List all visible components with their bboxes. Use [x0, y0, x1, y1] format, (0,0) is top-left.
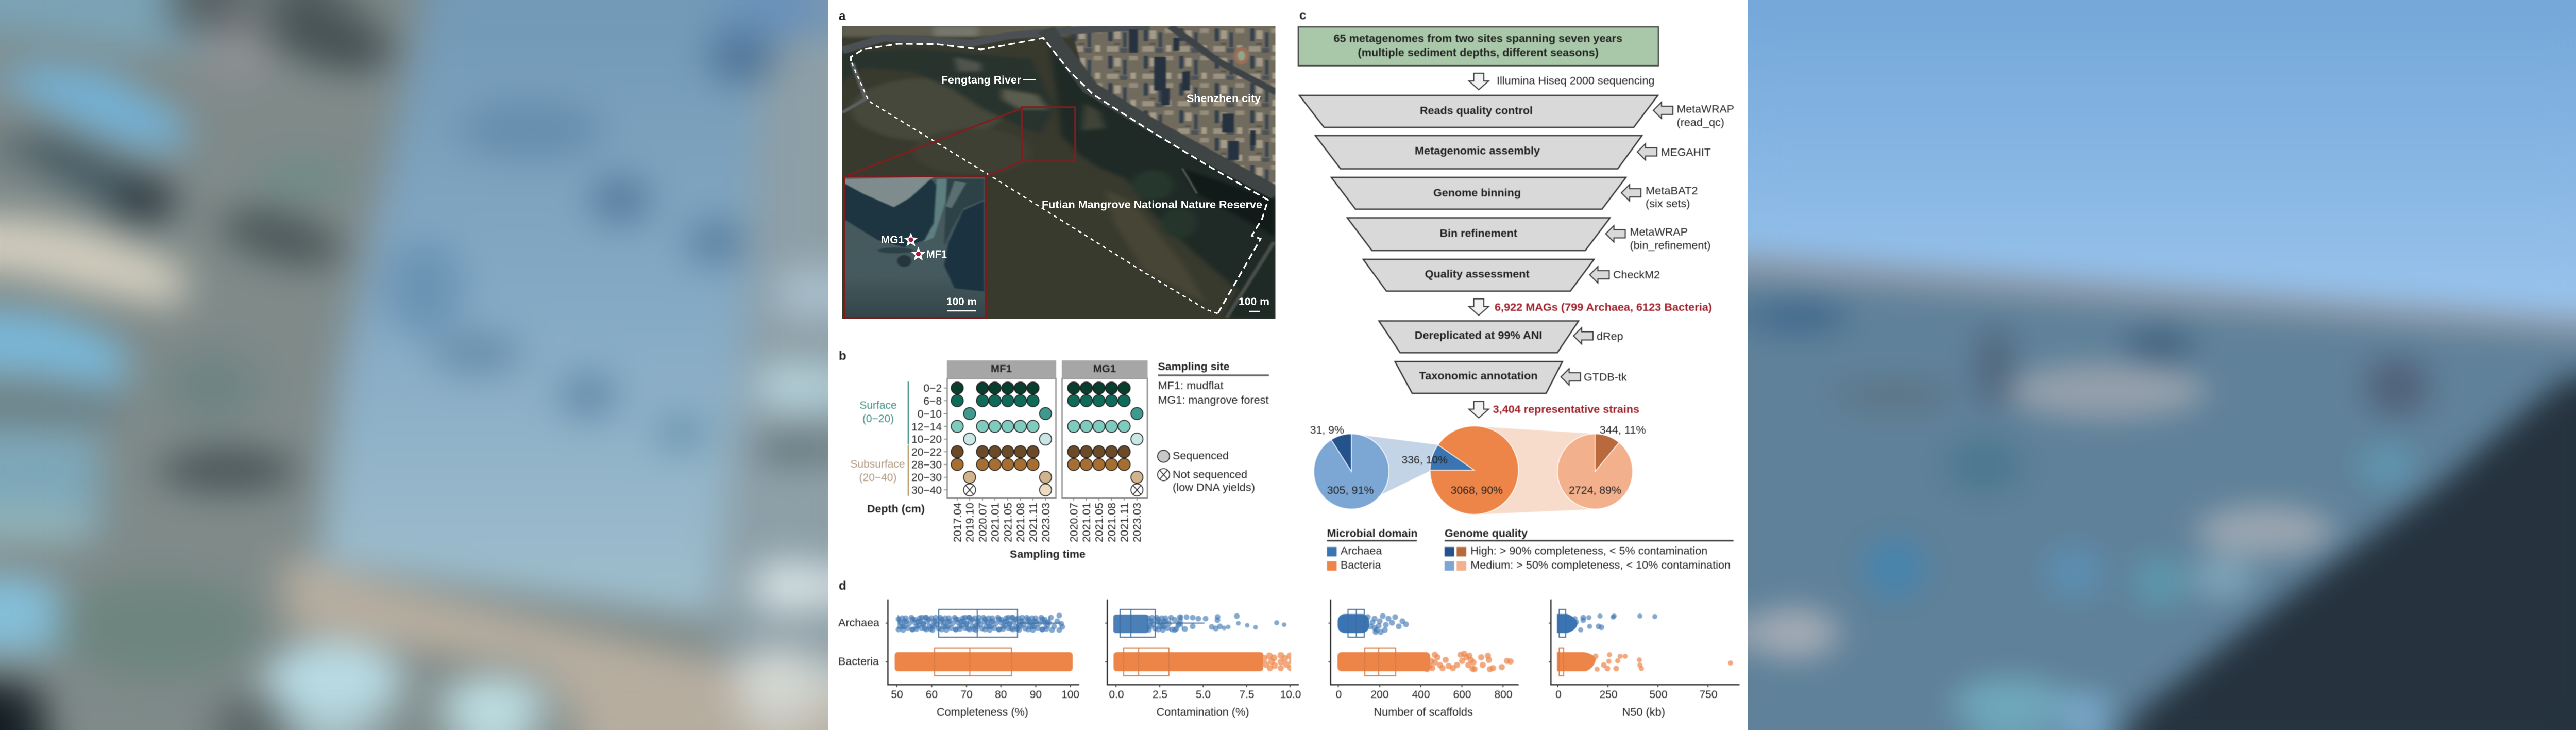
subsurface group label: (20−40): [859, 472, 896, 484]
sampling time labels: 2019.10: [964, 503, 976, 542]
strip plot: completeness: 90: [1030, 689, 1042, 701]
tool: MetaBAT2: [1621, 185, 1698, 210]
subsurface group label: [850, 445, 908, 496]
row label Bacteria: Bacteria: [838, 656, 879, 668]
strip plot: completeness: 70: [960, 689, 973, 701]
legend: genome quality: Medium: > 50% completeness, < 10% contamination: [1470, 559, 1731, 571]
depth axis labels: [911, 383, 942, 496]
legend: genome quality: High: > 90% completeness, < 5% contamination: [1470, 545, 1707, 557]
panel label c: c: [1299, 8, 1306, 23]
depth ticks: [944, 388, 947, 490]
legend: genome quality: [1445, 527, 1734, 571]
white figure panel: [828, 0, 1748, 730]
step: taxonomic annotation: Taxonomic annotation: [1419, 370, 1538, 382]
arrow: sequencing: Illumina Hiseq 2000 sequencing: [1497, 75, 1655, 87]
satellite image: [839, 24, 1277, 320]
label: Fengtang River: Fengtang River: [941, 74, 1021, 86]
site marker MG1: [881, 233, 918, 246]
depth axis labels: 6−8: [923, 395, 942, 407]
pie: bacteria quality: [1557, 424, 1646, 509]
strip plot: completeness: 80: [995, 689, 1007, 701]
strip plot: completeness: 100: [1061, 689, 1079, 701]
sampling time labels: 2021.05: [1003, 503, 1014, 542]
legend: genome quality: Genome quality: [1445, 527, 1528, 539]
step: taxonomic annotation: [1395, 361, 1563, 393]
surface group label: [859, 381, 908, 444]
strip plot: contamination: 5.0: [1196, 689, 1211, 701]
blurred photo background: left: [0, 0, 829, 730]
sampling time labels: 2021.11: [1119, 503, 1130, 542]
step: dereplicated: [1379, 321, 1579, 353]
pie: archaea quality: [1310, 424, 1389, 509]
strip plot: number of scaffolds: 0: [1336, 689, 1342, 701]
tool: GTDB-tk: [1561, 369, 1627, 385]
arrow: sequencing: [1469, 73, 1655, 90]
panel a: satellite map: [839, 9, 1277, 320]
site marker MF1: MF1: [926, 248, 947, 260]
step: reads quality control: Reads quality control: [1420, 105, 1533, 117]
pie: bacteria quality: 344, 11%: [1600, 424, 1646, 436]
sampling time labels: 2021.11: [1027, 503, 1040, 542]
pie: bacteria quality: 2724, 89%: [1569, 485, 1621, 496]
tool: CheckM2: [1590, 267, 1660, 283]
tool: MetaWRAP read_qc: MetaWRAP: [1676, 104, 1734, 115]
strip plot: contamination: [1105, 600, 1301, 718]
arrow: MAG count: 6,922 MAGs (799 Archaea, 6123 Bacteria): [1495, 302, 1712, 313]
strip plot: number of scaffolds: 800: [1494, 689, 1513, 701]
tool: MEGAHIT: MEGAHIT: [1661, 146, 1711, 159]
legend: not sequenced: (low DNA yields): [1173, 482, 1255, 494]
strip plot: number of scaffolds: 400: [1412, 689, 1430, 701]
strip plot: completeness: Completeness (%): [937, 706, 1028, 718]
tool: MetaWRAP read_qc: [1653, 102, 1734, 129]
label: Shenzhen city: Shenzhen city: [1187, 93, 1261, 105]
strip plot: N50: N50 (kb): [1622, 706, 1665, 718]
step: bin refinement: [1347, 218, 1610, 251]
sampling time labels: 2023.03: [1131, 503, 1143, 542]
legend: sampling site: [1158, 361, 1269, 406]
depth axis labels: 0−10: [918, 408, 942, 420]
facet MG1: MG1: [1093, 363, 1116, 375]
panel b: sampling dot plot: [839, 349, 1269, 560]
tool: MetaWRAP bin_refinement: [1606, 226, 1710, 252]
pie: archaea quality: 305, 91%: [1327, 485, 1374, 496]
input box: [1298, 27, 1658, 66]
legend: microbial domain: [1327, 527, 1418, 571]
sampling time labels: 2021.08: [1106, 503, 1118, 542]
sampling time labels: 2020.07: [977, 503, 989, 542]
strip plot: N50: 500: [1649, 689, 1668, 701]
panel label d: d: [839, 579, 846, 593]
strip plot: N50: [1549, 600, 1739, 718]
tool: MEGAHIT: [1637, 144, 1711, 160]
pie: all strains by domain: 3068, 90%: [1451, 485, 1503, 496]
strip plot: contamination: 10.0: [1280, 689, 1301, 701]
strip plot: number of scaffolds: Number of scaffolds: [1374, 706, 1473, 718]
tool: GTDB-tk: GTDB-tk: [1584, 372, 1627, 384]
strip plot: number of scaffolds: [1328, 600, 1519, 718]
legend: sequenced: Sequenced: [1173, 450, 1229, 462]
connector: bacteria breakdown: [1474, 426, 1595, 515]
sampling time labels: 2021.05: [1093, 503, 1106, 542]
step: quality assessment: [1363, 259, 1594, 291]
strip plot: contamination: Contamination (%): [1157, 706, 1249, 718]
strip plot: number of scaffolds: 200: [1370, 689, 1389, 701]
strip plot: N50: 750: [1699, 689, 1718, 701]
tool: dRep: [1573, 328, 1623, 344]
arrow: representative strains: [1469, 402, 1639, 418]
tool: CheckM2: CheckM2: [1613, 269, 1660, 281]
tool: MetaBAT2: MetaBAT2: [1646, 185, 1698, 197]
tool: dRep: dRep: [1597, 331, 1623, 342]
sampling time labels: 2023.03: [1040, 503, 1052, 542]
site marker MF1: [911, 246, 947, 260]
strip plot: completeness: 60: [926, 689, 938, 701]
arrow: representative strains: 3,404 representative strains: [1493, 404, 1639, 416]
red zoom box and connector lines: [845, 107, 1075, 176]
strip plot: contamination: 0.0: [1109, 689, 1124, 701]
depth axis labels: 20−30: [911, 472, 942, 484]
strip plot: completeness: [886, 600, 1079, 718]
legend: microbial domain: Microbial domain: [1327, 527, 1418, 539]
step: metagenomic assembly: Metagenomic assembly: [1415, 145, 1540, 157]
step: dereplicated: Dereplicated at 99% ANI: [1415, 330, 1542, 342]
depth axis labels: 30−40: [911, 485, 942, 496]
sampling time labels: 2017.04: [952, 503, 963, 542]
legend: microbial domain: Archaea: [1341, 545, 1382, 557]
step: bin refinement: Bin refinement: [1439, 228, 1517, 240]
pie: all strains by domain: [1401, 426, 1518, 515]
sampling time labels: 2021.08: [1015, 503, 1027, 542]
inset satellite image: [843, 176, 986, 318]
sampling time labels: [952, 503, 1143, 542]
facet MG1: [1062, 360, 1148, 498]
panel label b: b: [839, 349, 846, 363]
surface group label: Surface: [859, 400, 897, 411]
strip plot: contamination: 7.5: [1239, 689, 1255, 701]
depth axis labels: 0−2: [923, 383, 942, 394]
depth axis labels: 12−14: [911, 421, 942, 433]
dots MG1: [1067, 382, 1143, 496]
depth axis labels: 28−30: [911, 459, 942, 471]
pie: archaea quality: 31, 9%: [1310, 424, 1344, 436]
subsurface group label: Subsurface: [850, 458, 905, 470]
strip plot: N50: 250: [1599, 689, 1618, 701]
row label Archaea: Archaea: [838, 617, 879, 629]
step: metagenomic assembly: [1315, 136, 1642, 169]
axis title sampling time: Sampling time: [1010, 549, 1086, 560]
sampling time labels: 2020.07: [1069, 503, 1080, 542]
dots MF1: [951, 382, 1052, 496]
legend: sampling site: MG1: mangrove forest: [1158, 394, 1269, 406]
legend: not sequenced: [1158, 469, 1255, 494]
pie: all strains by domain: 336, 10%: [1401, 454, 1448, 466]
surface group label: (0−20): [862, 413, 894, 425]
step: genome binning: [1331, 177, 1626, 209]
input box: (multiple sediment depths, different seasons): [1358, 47, 1599, 59]
tool: MetaWRAP read_qc: (read_qc): [1676, 117, 1724, 129]
tool: MetaWRAP bin_refinement: MetaWRAP: [1630, 226, 1688, 238]
legend: sampling site: Sampling site: [1158, 361, 1229, 373]
axis title depth: Depth (cm): [867, 503, 925, 515]
legend: microbial domain: Bacteria: [1341, 559, 1381, 571]
facet MF1: [947, 360, 1056, 498]
depth axis labels: 20−22: [911, 446, 942, 458]
scale bar inset: 100 m: [946, 296, 977, 308]
scale bar map: 100 m: [1239, 296, 1269, 308]
blurred photo background: right: [1747, 0, 2576, 730]
arrow: MAG count: [1469, 299, 1712, 316]
label: Futian Mangrove National Nature Reserve: Futian Mangrove National Nature Reserve: [1042, 199, 1262, 211]
connector: archaea breakdown: [1351, 434, 1438, 509]
tool: MetaWRAP bin_refinement: (bin_refinement): [1630, 240, 1710, 252]
reserve boundary dashed outline: [851, 38, 1268, 313]
panel c: bioinformatics workflow: [1298, 8, 1734, 571]
facet MF1: MF1: [991, 363, 1012, 375]
panel d: genome statistics strip plots: [838, 579, 1739, 718]
step: quality assessment: Quality assessment: [1425, 269, 1530, 280]
panel label a: a: [839, 9, 846, 23]
sampling time labels: 2021.01: [1081, 503, 1093, 542]
depth axis labels: 10−20: [911, 434, 942, 445]
strip plot: completeness: 50: [891, 689, 903, 701]
time ticks: [957, 498, 1137, 501]
strip plot: contamination: 2.5: [1153, 689, 1167, 701]
strip plot: number of scaffolds: 600: [1453, 689, 1471, 701]
input box: 65 metagenomes from two sites spanning seven years: [1333, 33, 1622, 44]
step: genome binning: Genome binning: [1433, 187, 1521, 199]
legend: not sequenced: Not sequenced: [1173, 469, 1247, 481]
tool: MetaBAT2: (six sets): [1646, 198, 1690, 210]
legend: sampling site: MF1: mudflat: [1158, 380, 1224, 392]
site marker MG1: MG1: [881, 234, 904, 246]
sampling time labels: 2021.01: [989, 503, 1002, 542]
step: reads quality control: [1299, 95, 1658, 127]
strip plot: N50: 0: [1555, 689, 1562, 701]
